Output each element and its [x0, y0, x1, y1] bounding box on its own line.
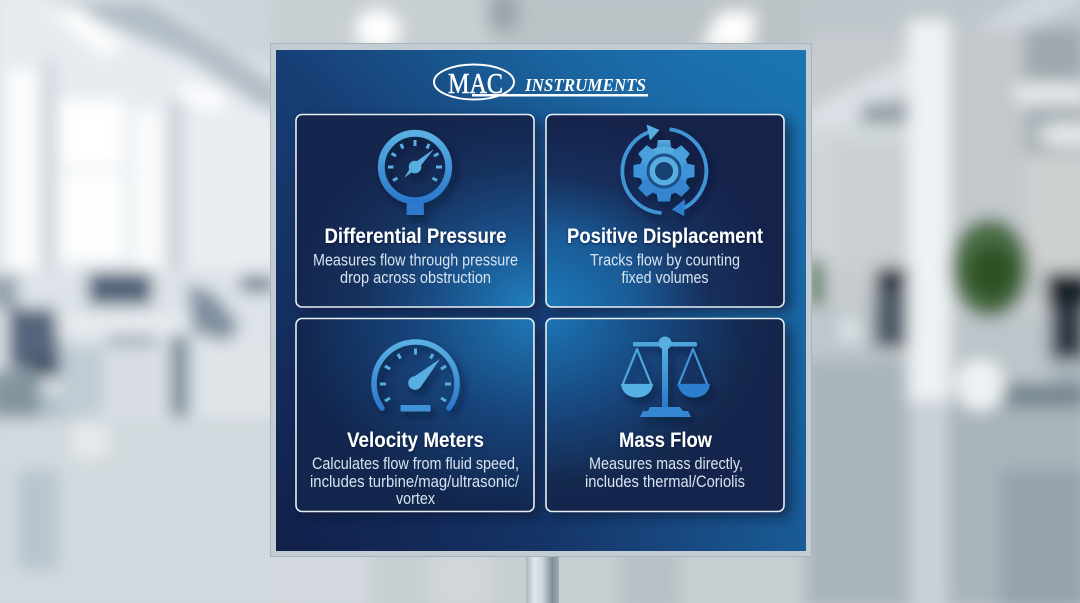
panel: Mass Flow	[546, 318, 784, 512]
sign board	[270, 44, 812, 556]
icon: speedometer	[374, 342, 457, 412]
icon: balance scale	[621, 336, 710, 417]
description	[585, 455, 745, 491]
sign frame	[270, 44, 812, 556]
description: Tracks flow by counting	[590, 252, 740, 270]
description: drop across obstruction	[340, 269, 491, 287]
description: Calculates flow from fluid speed,	[312, 455, 519, 473]
bottom strip	[270, 550, 820, 603]
sign pole	[526, 556, 559, 603]
top strip	[270, 0, 490, 50]
description	[590, 252, 740, 287]
logo: MAC Instruments	[434, 64, 648, 100]
card shadows	[301, 120, 791, 517]
icon: gear with rotation arrows	[622, 124, 706, 216]
heading: Mass Flow	[619, 429, 713, 452]
left office	[0, 0, 280, 290]
logo: MAC Instruments: MAC	[448, 68, 503, 100]
icon: pressure gauge	[381, 133, 449, 215]
description: Measures flow through pressure	[313, 252, 518, 270]
description: fixed volumes	[622, 269, 708, 287]
description	[313, 252, 518, 287]
description	[310, 455, 519, 508]
description: includes turbine/mag/ultrasonic/	[310, 473, 519, 491]
panel: Positive Displacement	[546, 114, 784, 307]
right office	[805, 0, 1080, 380]
heading: Differential Pressure	[324, 225, 506, 248]
heading: Positive Displacement	[567, 225, 763, 248]
panel: Velocity Meters	[296, 318, 534, 512]
heading: Velocity Meters	[347, 429, 484, 452]
panel: Differential Pressure	[296, 114, 534, 307]
description: Measures mass directly,	[589, 455, 743, 473]
sign blue panel	[276, 50, 806, 551]
logo: MAC Instruments: INSTRUMENTS	[524, 75, 646, 95]
description: includes thermal/Coriolis	[585, 473, 745, 491]
description: vortex	[396, 490, 436, 508]
